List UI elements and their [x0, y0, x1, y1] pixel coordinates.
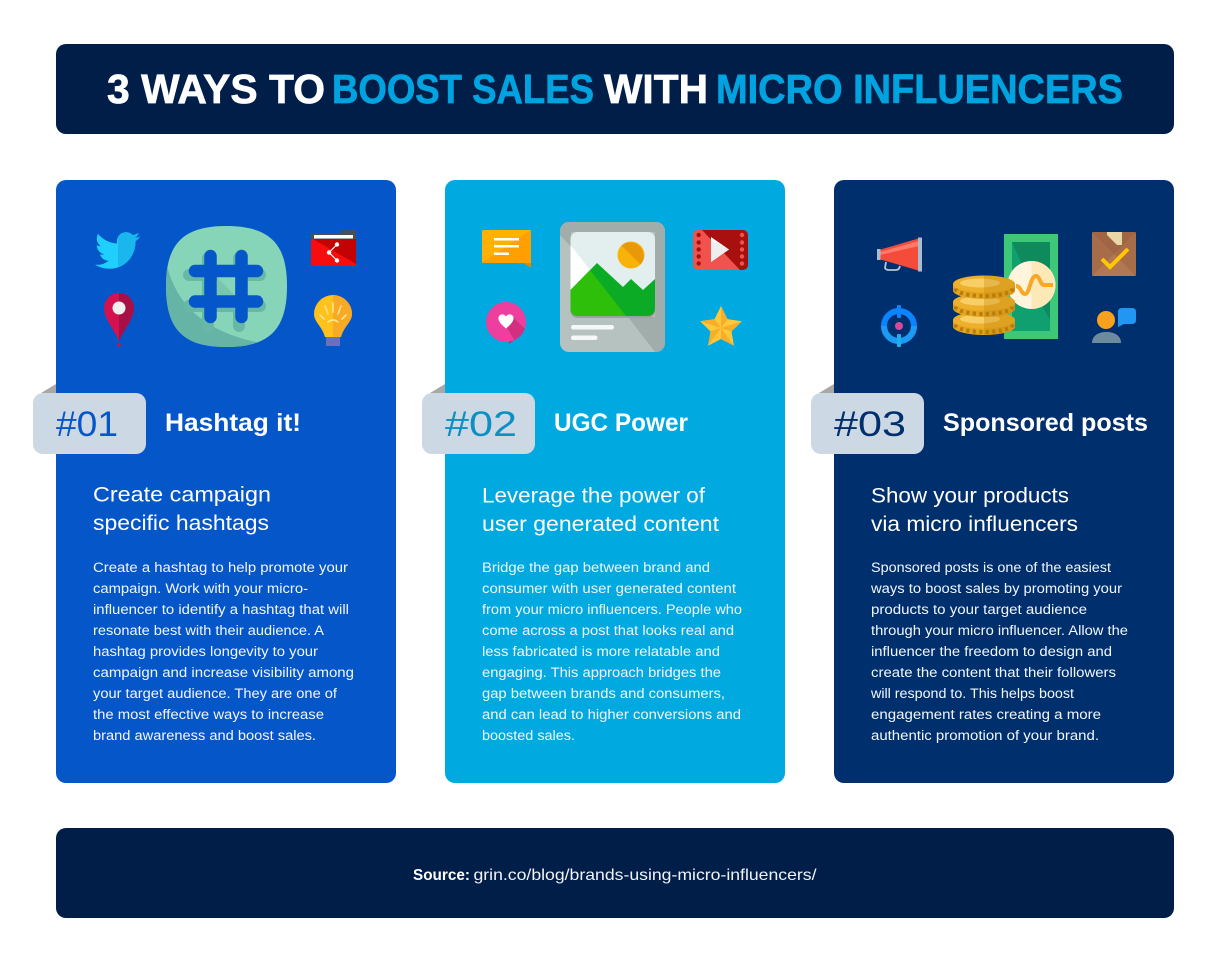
subheading: specific hashtags — [93, 512, 269, 535]
title: 3 WAYS TO — [107, 66, 325, 112]
body text: your target audience. They are one of — [93, 686, 337, 701]
number badge 03: #03 — [834, 405, 906, 444]
subheading: user generated content — [482, 513, 719, 536]
coin stack — [953, 276, 1015, 335]
body text: ways to boost sales by promoting your — [870, 581, 1123, 596]
title banner — [56, 44, 1174, 134]
subheading: Create campaign — [93, 484, 271, 506]
title — [107, 66, 1123, 112]
body text: resonate best with their audience. A — [93, 623, 324, 638]
body text: boosted sales. — [482, 728, 575, 743]
icon: money and coins — [953, 234, 1058, 339]
icon: photo post — [560, 222, 665, 352]
panel: hashtag it — [33, 180, 396, 783]
body text: create the content that their followers — [871, 665, 1116, 680]
title: BOOST SALES — [332, 66, 594, 112]
panel: sponsored posts — [811, 180, 1174, 783]
body text: influencer to identify a hashtag that will — [93, 602, 349, 617]
icon: heart bubble — [486, 302, 526, 344]
body text: campaign and increase visibility among — [93, 665, 354, 680]
title: MICRO INFLUENCERS — [716, 66, 1123, 112]
body text: gap between brands and consumers, — [482, 686, 725, 701]
panel: UGC power — [422, 180, 785, 783]
body text: hashtag provides longevity to your — [93, 644, 319, 659]
body text: Create a hashtag to help promote your — [93, 560, 349, 575]
subheading — [482, 484, 719, 536]
body text: come across a post that looks real and — [482, 623, 734, 638]
source line: grin.co/blog/brands-using-micro-influencers/ — [474, 867, 817, 884]
number badge 02 — [422, 384, 535, 454]
subheading: Leverage the power of — [482, 484, 705, 508]
icon: target — [884, 305, 914, 347]
body text: engagement rates creating a more — [871, 707, 1101, 722]
subheading: via micro influencers — [871, 513, 1078, 536]
number badge 03 — [811, 384, 924, 454]
icon: twitter bird — [95, 232, 140, 269]
icon: star — [700, 306, 742, 346]
body text: the most effective ways to increase — [93, 707, 324, 722]
icon: share folder — [311, 230, 356, 266]
icon: message bubble — [482, 230, 531, 268]
body text — [482, 560, 742, 743]
body text: influencer the freedom to design and — [871, 644, 1112, 659]
number badge 01 — [33, 384, 146, 454]
number badge 02: #02 — [445, 405, 517, 444]
body text: Bridge the gap between brand and — [482, 560, 710, 575]
title: WITH — [604, 66, 708, 112]
body text: from your micro influencers. People who — [482, 602, 742, 617]
icon: light bulb — [314, 295, 352, 346]
body text: through your micro influencer. Allow the — [871, 623, 1128, 638]
body text: engaging. This approach bridges the — [482, 665, 721, 680]
icon: megaphone — [877, 238, 922, 272]
footer banner — [56, 828, 1174, 918]
number badge 01: #01 — [56, 405, 118, 444]
icon: person with chat — [1092, 308, 1136, 343]
body text: brand awareness and boost sales. — [93, 728, 316, 743]
body text: will respond to. This helps boost — [870, 686, 1074, 701]
subheading: Show your products — [871, 484, 1069, 508]
icon: package with check — [1092, 232, 1136, 276]
body text: campaign. Work with your micro- — [93, 581, 308, 596]
icon: video player — [693, 230, 750, 272]
body text: consumer with user generated content — [482, 581, 736, 596]
body text: less fabricated is more relatable and — [482, 644, 720, 659]
body text: Sponsored posts is one of the easiest — [871, 560, 1111, 575]
subheading — [93, 484, 271, 535]
body text: products to your target audience — [871, 602, 1087, 617]
body text — [870, 560, 1128, 743]
heading: Hashtag it! — [165, 409, 301, 437]
icon: hashtag badge — [160, 226, 287, 352]
source line: Source: — [413, 867, 470, 884]
heading: UGC Power — [554, 409, 688, 437]
icon: map pin — [104, 293, 134, 347]
subheading — [871, 484, 1078, 536]
body text: and can lead to higher conversions and — [482, 707, 741, 722]
body text — [93, 560, 354, 743]
heading: Sponsored posts — [943, 409, 1148, 437]
body text: authentic promotion of your brand. — [871, 728, 1099, 743]
